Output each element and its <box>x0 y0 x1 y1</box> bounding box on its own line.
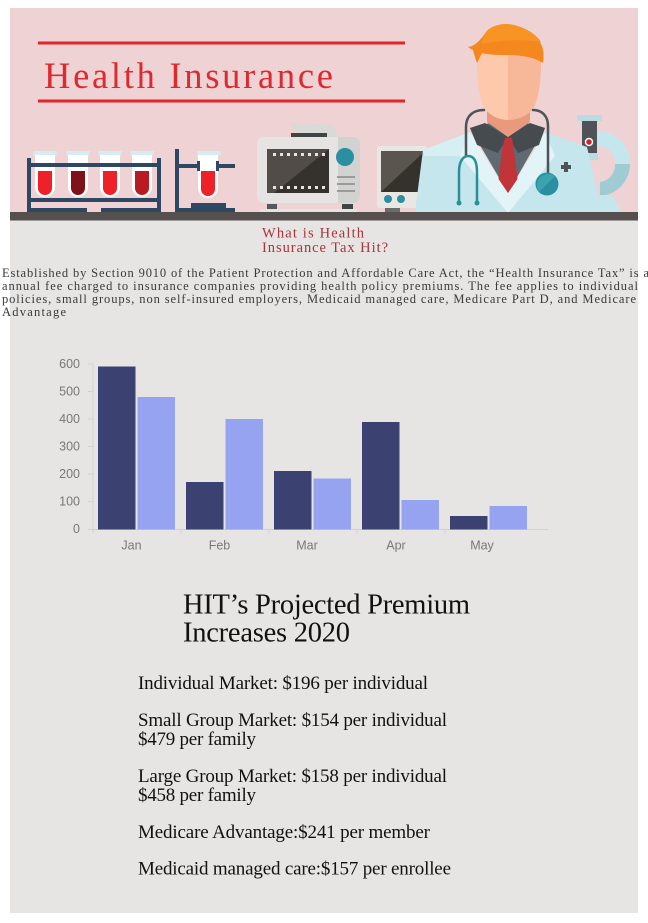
face <box>477 50 508 120</box>
individual market: Individual Market: $196 per individual <box>138 673 428 694</box>
icon: microscope <box>577 115 630 212</box>
large group market: $458 per family <box>138 785 256 806</box>
series 1 bars <box>98 366 488 530</box>
x axis labels: Jan <box>121 538 142 552</box>
stethoscope <box>459 110 548 202</box>
x axis labels <box>121 538 495 552</box>
shirt and collar <box>470 123 545 193</box>
y axis labels: 200 <box>59 467 80 481</box>
tie <box>498 138 518 193</box>
title rule top <box>38 42 405 44</box>
intro text: Established by Section 9010 of the Patient Protection and Affordable Care Act, the “Health Insurance Tax” is a <box>2 266 648 280</box>
y axis labels: 400 <box>59 412 80 426</box>
large group market: Large Group Market: $158 per individual <box>138 766 447 787</box>
x axis labels: May <box>470 538 495 552</box>
y axis labels: 100 <box>59 494 80 508</box>
heading: projected premium increases <box>183 590 470 649</box>
small group market: $479 per family <box>138 729 256 750</box>
heading: projected premium increases: Increases 2020 <box>183 618 350 649</box>
subtitle <box>262 226 388 256</box>
title rule bottom <box>38 100 405 102</box>
icon: medical machine <box>257 123 360 212</box>
x axis labels: Feb <box>209 538 230 552</box>
premium list <box>138 673 451 880</box>
icon: retort stand <box>175 149 235 212</box>
floor <box>10 212 638 220</box>
y axis labels: 600 <box>59 357 80 371</box>
icon: monitor <box>377 146 427 212</box>
medicaid managed care: Medicaid managed care:$157 per enrollee <box>138 859 451 880</box>
y axis labels: 300 <box>59 440 80 454</box>
banner background <box>10 8 638 212</box>
small group market: Small Group Market: $154 per individual <box>138 710 447 731</box>
medicare advantage: Medicare Advantage:$241 per member <box>138 822 431 843</box>
banner <box>10 8 638 220</box>
icon: test tube rack <box>27 151 161 212</box>
y axis labels <box>59 357 80 536</box>
subtitle: Insurance Tax Hit? <box>262 240 388 256</box>
intro text <box>2 266 648 319</box>
subtitle: What is Health <box>262 226 365 242</box>
y axis labels: 0 <box>73 522 80 536</box>
series 2 bars <box>138 397 527 530</box>
coat <box>415 132 602 213</box>
title: Health Insurance <box>44 55 333 96</box>
badge cross <box>561 162 571 172</box>
small group market <box>138 710 447 750</box>
hair <box>468 24 544 63</box>
x axis labels: Apr <box>386 538 406 552</box>
large group market <box>138 766 447 806</box>
intro text: Advantage <box>2 305 66 319</box>
neck <box>487 108 530 137</box>
icon: doctor <box>415 24 602 213</box>
intro text: annual fee charged to insurance companies providing health policy premiums. The fee applies to individual <box>2 279 639 293</box>
x axis labels: Mar <box>296 538 318 552</box>
intro text: policies, small groups, non self-insured employers, Medicaid managed care, Medicare Part D, and Medicare <box>2 292 636 306</box>
y axis labels: 500 <box>59 384 80 398</box>
bar chart <box>59 357 548 552</box>
heading: projected premium increases: HIT’s Projected Premium <box>183 590 470 620</box>
